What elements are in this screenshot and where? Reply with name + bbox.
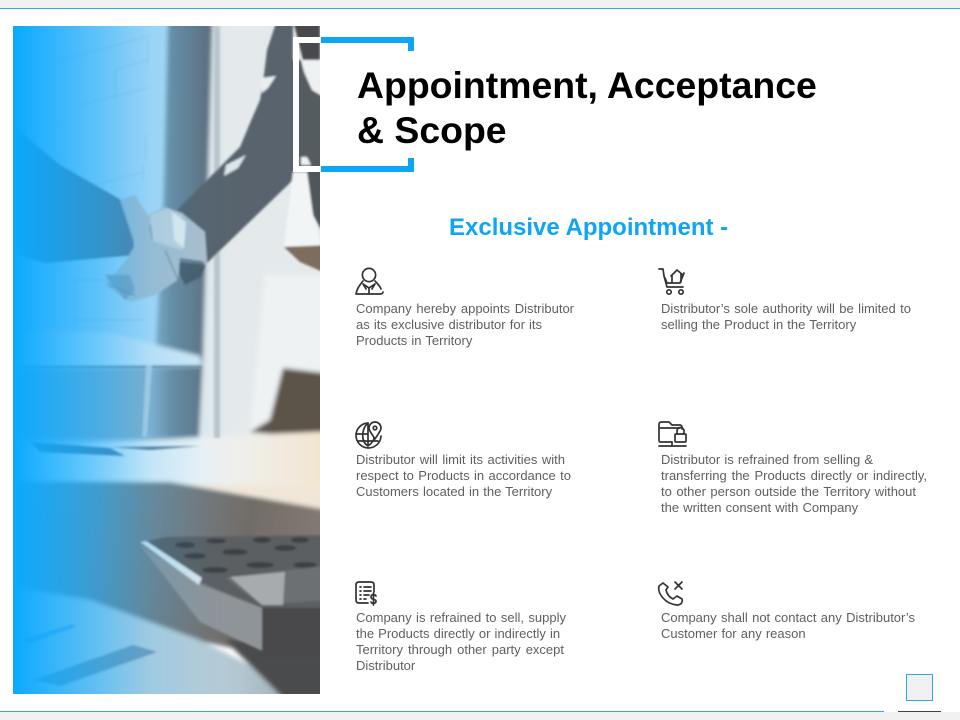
text: shall not contact: Company shall not contact any Distributor’s [661, 610, 915, 625]
text: limit activities: Distributor will limit its activities with [356, 452, 565, 467]
text: limit activities: Customers located in the Territory [356, 484, 552, 499]
text: refrained to sell: Company is refrained to sell, supply [356, 610, 566, 625]
text: limit activities: respect to Products in accordance to [356, 468, 571, 483]
text: refrained from selling: Distributor is refrained from selling & [661, 452, 873, 467]
gradient overlay [13, 26, 200, 694]
right sleeve [177, 20, 293, 263]
text: sole authority: Distributor’s sole authority will be limited to [661, 301, 911, 316]
brown desk item [284, 244, 320, 272]
brown cloth [250, 366, 320, 437]
text: sole authority [661, 301, 911, 332]
text: shall not contact: Customer for any reason [661, 626, 806, 641]
title frame: blue right bracket [321, 37, 414, 172]
title: & Scope [357, 109, 507, 151]
text: refrained to sell: Territory through other party except [356, 642, 564, 657]
bottom dark rule [898, 711, 941, 712]
text: refrained from selling: the written consent with Company [661, 500, 858, 515]
window band [150, 10, 213, 440]
text: appoints distributor: as its exclusive distributor for its [356, 317, 542, 332]
corner square [906, 674, 933, 701]
lower surface [32, 592, 282, 694]
subheading: Exclusive Appointment - [449, 214, 728, 241]
text: refrained from selling: transferring the Products directly or indirectly, [661, 468, 927, 483]
text: appoints distributor: Products in Territory [356, 333, 472, 348]
hands [105, 195, 207, 302]
bottom band [0, 712, 960, 720]
brick lines [147, 60, 148, 61]
wall [32, 26, 170, 446]
white patch [252, 277, 320, 428]
top band [0, 0, 960, 9]
keyboard [140, 535, 330, 610]
text: refrained to sell: Distributor [356, 658, 415, 673]
text: refrained from selling: to other person outside the Territory without [661, 484, 916, 499]
title: Appointment, Acceptance [357, 64, 817, 106]
text: shall not contact [661, 610, 915, 641]
text: refrained to sell: the Products directly or indirectly in [356, 626, 560, 641]
text: appoints distributor [356, 301, 574, 348]
text: appoints distributor: Company hereby appoints Distributor [356, 301, 574, 316]
title [357, 64, 817, 151]
title frame: white left bracket [293, 37, 321, 172]
wall right [196, 26, 320, 438]
text: refrained from selling [661, 452, 927, 515]
left sleeve [28, 141, 135, 263]
bottom blue rule [0, 711, 884, 712]
table [51, 428, 320, 490]
sill [52, 332, 204, 370]
lower window brick [43, 368, 156, 442]
text: sole authority: selling the Product in the Territory [661, 317, 856, 332]
desk [24, 479, 320, 650]
laptop front [142, 548, 264, 652]
text: limit activities [356, 452, 571, 499]
text: refrained to sell [356, 610, 566, 673]
paper marks [33, 645, 157, 686]
cuff [178, 262, 205, 285]
photo panel: handshake with blue gradient [13, 26, 320, 694]
